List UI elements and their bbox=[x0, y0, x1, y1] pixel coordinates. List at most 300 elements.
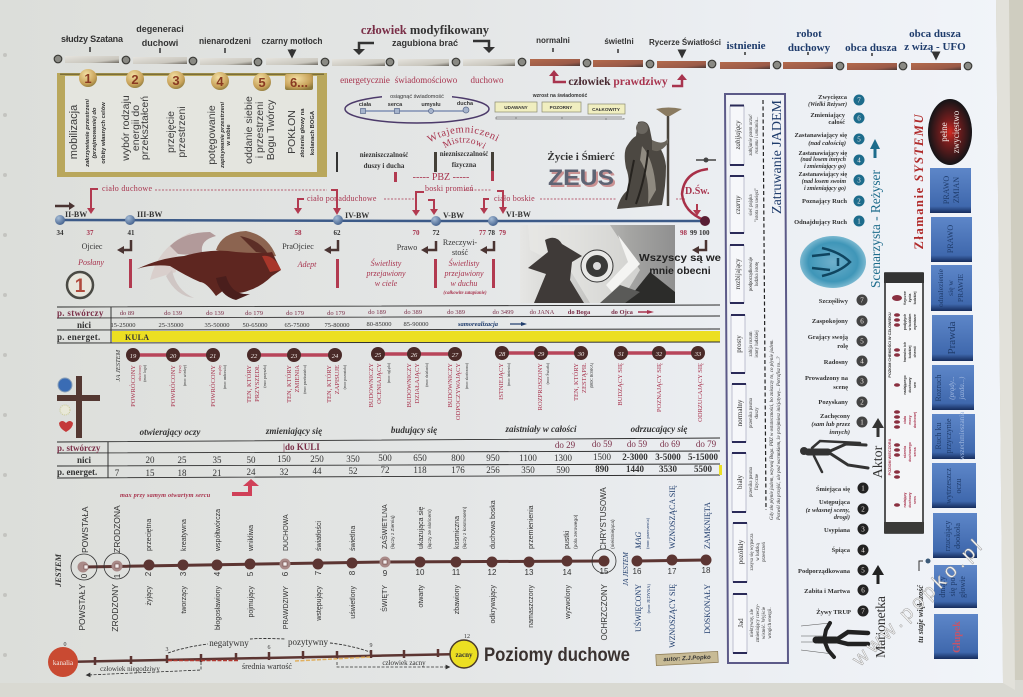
vertical labels below chain: uświetlony bbox=[350, 586, 357, 619]
box: Rozruch: (prądy... bbox=[948, 376, 956, 400]
labels beneath timeline: (całkowite zatapianie) bbox=[443, 291, 487, 296]
table: p. stwórczy, nici, p. energet. (lower): p. stwórczy bbox=[57, 443, 101, 453]
step text bbox=[68, 95, 316, 169]
vertical labels under chain: (moc uzdrawia) bbox=[223, 364, 227, 389]
scale: kanalia to zacny: człowiek niegodziwy bbox=[100, 665, 160, 673]
box: Głupek: Głupek bbox=[952, 621, 963, 653]
top headings: left group: duchowi bbox=[142, 38, 178, 48]
top headings: left group: degeneraci bbox=[136, 24, 184, 34]
section labels: budujący się bbox=[391, 425, 437, 435]
table: p. stwórczy, nici, p. energet. (lower): 7 bbox=[115, 468, 120, 478]
table: p. stwórczy, nici, p. energet. (upper): 35-50000 bbox=[205, 322, 229, 329]
table: p. stwórczy, nici, p. energet. (lower): nici bbox=[77, 455, 91, 465]
vertical labels above chain: CHRYSTUSOWA bbox=[599, 487, 608, 550]
box: normalny: przenika pasma bbox=[749, 397, 754, 428]
step text: Bogu Twórcy bbox=[265, 99, 277, 160]
list: Aktor levels: Radosny bbox=[824, 359, 849, 366]
timeline: blue line with nodes: 78 bbox=[488, 229, 496, 237]
table: p. stwórczy, nici, p. energet. (upper): 75-80000 bbox=[325, 322, 349, 329]
chain: circles 19 to 33: 28 bbox=[499, 351, 506, 358]
box: dmący się po głowie: głowie bbox=[958, 576, 967, 598]
box: rozbijający: podporządkowuje bbox=[749, 257, 754, 291]
table: p. stwórczy, nici, p. energet. (lower): 72 bbox=[380, 465, 390, 475]
timeline: blue line with nodes: 99 bbox=[690, 229, 698, 237]
chain: spiritual levels 0–18: 15 bbox=[600, 567, 609, 576]
badge: pełne zwycięstwo: zwycięstwo bbox=[951, 110, 961, 153]
niezniszczalność blocks and PBZ: niezniszczalność bbox=[440, 150, 488, 158]
vertical labels below chain: WZNOSZĄCY SIĘ bbox=[668, 584, 677, 648]
vertical labels below chain bbox=[77, 551, 712, 648]
vertical labels under chain: ODRZUCAJĄCY SIĘ bbox=[697, 363, 704, 422]
table: p. stwórczy, nici, p. energet. (upper): do 389 bbox=[447, 309, 465, 316]
box: Rozruch: Rozruch bbox=[934, 374, 943, 402]
vertical labels under chain: (MOC BOSKA) bbox=[590, 362, 594, 388]
chain: spiritual levels 0–18: 16 bbox=[633, 567, 642, 576]
scale: kanalia to zacny: 0 bbox=[64, 642, 66, 648]
text: Wszyscy są we mnie obecni: mnie obecni bbox=[649, 265, 711, 277]
table: p. stwórczy, nici, p. energet. (lower): 500 bbox=[378, 453, 392, 463]
table: p. stwórczy, nici, p. energet. (lower): 250 bbox=[310, 454, 324, 464]
timeline: blue line with nodes: V-BW bbox=[443, 211, 464, 220]
vertical labels under chain: TEN, KTÓRY bbox=[245, 365, 253, 403]
box: zabijający bbox=[730, 106, 760, 165]
vertical labels above chain: wnikliwa bbox=[248, 525, 255, 552]
chain: spiritual levels 0–18: 3 bbox=[179, 571, 188, 576]
list: Scenarzysta levels: i zmieniający go) bbox=[804, 163, 846, 170]
list: Scenarzysta levels bbox=[794, 94, 883, 288]
box: odnalezienie się w PRAWIE: PRAWIE bbox=[956, 274, 965, 302]
timeline: blue line with nodes: 72 bbox=[432, 229, 440, 237]
vertical labels above chain: przeciętna bbox=[146, 519, 153, 551]
table: p. stwórczy, nici, p. energet. (upper): KULA bbox=[125, 333, 149, 342]
list: Aktor levels: scenę bbox=[833, 384, 848, 391]
step text: i przestrzeni bbox=[254, 102, 266, 158]
timeline: blue line with nodes: 77 bbox=[479, 229, 486, 237]
vertical labels under chain: ZAPISUJE bbox=[334, 365, 341, 394]
chain: circles 19 to 33: 24 bbox=[332, 353, 339, 360]
panel: levels of heat (black frame): życia bbox=[908, 294, 912, 302]
box: Jad: Jad bbox=[737, 618, 745, 628]
step numbers: 6... bbox=[290, 75, 308, 90]
panel: levels of heat (black frame): duchowy bbox=[908, 492, 912, 508]
vertical labels above chain: JESTEM bbox=[53, 553, 63, 588]
heading group: ciało duchowe, ponadduchowe, boski promień, boskie bbox=[87, 184, 701, 216]
ZEUS title: ZEUS bbox=[550, 167, 616, 192]
table: p. stwórczy, nici, p. energet. (upper): p. energet. bbox=[57, 332, 101, 342]
list: Aktor levels: Grający swoją bbox=[808, 334, 849, 341]
box: Jad: zmieniający rzeczy- bbox=[756, 603, 761, 642]
vertical labels below chain: otwarty bbox=[418, 585, 425, 608]
boxes: UDAWANY, POZORNY, CAŁKOWITY: POZORNY bbox=[550, 105, 572, 110]
table: p. stwórczy, nici, p. energet. (upper): 50-65000 bbox=[243, 322, 267, 329]
box: normalny: duszy bbox=[755, 407, 760, 419]
scale: kanalia to zacny: człowiek zacny bbox=[382, 659, 426, 667]
image: warrior photo with mandala bbox=[520, 225, 675, 303]
panel: levels of heat (black frame): chemii bbox=[913, 346, 917, 358]
box: czarny: czarny bbox=[734, 195, 742, 214]
niezniszczalność blocks and PBZ: ----- PBZ ----- bbox=[413, 172, 469, 183]
box: prosty: zabija rozum bbox=[749, 331, 754, 356]
labels beneath timeline: Świetlisty bbox=[449, 259, 480, 268]
chain: spiritual levels 0–18: 5 bbox=[246, 571, 255, 576]
box: wytrzeszcz oczu bbox=[932, 463, 976, 508]
box: czarny: sieć pająka bbox=[749, 194, 754, 216]
chain: circles 19 to 33: 33 bbox=[694, 351, 702, 358]
box: rzucający dookoła: rzucający bbox=[943, 521, 952, 551]
step numbers: 5 bbox=[258, 75, 266, 90]
list: Marionetka levels: 6 bbox=[861, 586, 865, 594]
list: Aktor levels: rolę bbox=[837, 343, 848, 350]
table: p. stwórczy, nici, p. energet. (lower): 950 bbox=[486, 453, 500, 463]
box: Jad: niektywny, ale bbox=[750, 609, 755, 637]
vertical labels under chain: TEN, KTÓRY bbox=[285, 365, 293, 403]
badge: pełne zwycięstwo: pełne bbox=[939, 122, 949, 142]
list: Aktor levels: (sam lub przez bbox=[811, 421, 850, 428]
ellipse: osiągnąć świadomość: ducha bbox=[457, 101, 474, 107]
timeline: blue line with nodes: 41 bbox=[128, 229, 135, 237]
ZEUS title bbox=[547, 151, 616, 192]
list: Aktor levels: Pozyskany bbox=[818, 399, 849, 406]
vertical labels under chain: ROZPROSZONY bbox=[537, 363, 544, 410]
list: Marionetka levels: 7 bbox=[861, 608, 865, 616]
title: Poziomy duchowe: Poziomy duchowe bbox=[484, 645, 630, 666]
table: p. stwórczy, nici, p. energet. (lower): 350 bbox=[521, 465, 535, 475]
table: p. stwórczy, nici, p. energet. (lower): 50 bbox=[246, 455, 256, 465]
panel: levels of heat (black frame): duchowej bbox=[913, 412, 917, 428]
chain: spiritual levels 0–18: 18 bbox=[702, 566, 711, 575]
vertical labels under chain: BUDOWNICZY bbox=[447, 363, 454, 407]
table: p. stwórczy, nici, p. energet. (lower): 32 bbox=[280, 467, 288, 477]
heading: człowiek modyfikowany: duchowo bbox=[470, 75, 504, 85]
vertical labels below chain: zbawiony bbox=[454, 585, 461, 614]
panel: levels of heat (black frame): duchowy bbox=[908, 377, 912, 393]
timeline: blue line with nodes: II-BW bbox=[65, 210, 87, 219]
box: prosty: istoty ludzkiej bbox=[755, 330, 760, 358]
chain: circles 19 to 33: 26 bbox=[411, 352, 418, 359]
D.Św. arc: D.Św. bbox=[685, 185, 710, 197]
box: normalny bbox=[732, 384, 760, 442]
boxes: UDAWANY, POZORNY, CAŁKOWITY bbox=[495, 93, 625, 120]
timeline: blue line with nodes: 100 bbox=[699, 229, 710, 237]
list: Marionetka levels: Podporządkowana bbox=[798, 568, 851, 575]
box: Rozruch bbox=[932, 365, 974, 410]
step text: zakrzywianie przestrzeni bbox=[85, 99, 91, 168]
heading: człowiek modyfikowany: człowiek modyfikowany bbox=[361, 23, 490, 37]
panel: levels of heat (black frame): serca bbox=[913, 447, 917, 457]
vertical labels under chain: PRZYSZEDŁ bbox=[254, 365, 261, 402]
step text: złożenie głowy na bbox=[300, 108, 306, 157]
chain: spiritual levels 0–18: 1 bbox=[113, 573, 122, 578]
vertical labels above chain: duchowa boska bbox=[490, 500, 497, 549]
table: p. stwórczy, nici, p. energet. (upper): do 389 bbox=[404, 309, 422, 316]
vertical labels below chain: POWSTAŁY bbox=[77, 584, 87, 631]
table: p. stwórczy, nici, p. energet. (lower): 24 bbox=[246, 467, 256, 477]
callout: tu staje większość bbox=[916, 558, 930, 643]
box: PRAWO bbox=[931, 217, 972, 262]
box: czarny bbox=[730, 176, 760, 233]
section labels: zmieniający się bbox=[265, 426, 322, 436]
vertical labels under chain: POWRÓCONY bbox=[169, 365, 177, 407]
panel: levels of heat (black frame): POZIOM WIECZORA bbox=[888, 438, 892, 475]
step numbers: 1 bbox=[84, 71, 92, 86]
text: advice about poison: Pozwól złu przejść, ale pod warunkiem, że przejmiesz inicjatywę... Potrafisz to...? bbox=[777, 356, 782, 521]
candle flames bbox=[892, 295, 902, 507]
chain: spiritual levels 0–18: 14 bbox=[563, 568, 572, 577]
box: Głupek bbox=[934, 614, 978, 659]
panel: levels of heat (black frame): nadający bbox=[903, 492, 907, 507]
table: p. stwórczy, nici, p. energet. (lower): do 79 bbox=[696, 439, 717, 449]
vertical labels under chain: (moc przyszła) bbox=[263, 364, 267, 388]
list: Scenarzysta levels: 4 bbox=[857, 156, 861, 164]
chain: circles 19 to 33: 30 bbox=[577, 351, 585, 358]
timeline: blue line with nodes: 62 bbox=[334, 229, 341, 237]
panel: levels of heat (black frame): sens bbox=[913, 496, 917, 504]
step numbers: 3 bbox=[172, 73, 180, 88]
box: Rozruch: jazda...) bbox=[958, 376, 966, 400]
vertical labels below chain: odkrywający bbox=[490, 585, 497, 624]
vertical labels under chain: (moc pozostała) bbox=[343, 364, 347, 389]
callout: max przy samym otwartym sercu bbox=[120, 479, 259, 499]
list: Marionetka levels: Śpiąca bbox=[832, 546, 851, 554]
icon: blue face bbox=[800, 236, 866, 288]
timeline: blue line with nodes: 70 bbox=[412, 229, 420, 237]
panel: levels of heat (black frame): ludzkiej bbox=[908, 346, 912, 358]
vertical labels below chain: UŚWIĘCONY bbox=[633, 584, 643, 632]
box: pozółkły bbox=[733, 523, 767, 582]
table: p. stwórczy, nici, p. energet. (lower): 52 bbox=[348, 466, 358, 476]
vertical labels under chain: ISTNIEJĄCY bbox=[498, 363, 505, 400]
list: Aktor levels: 2 bbox=[860, 398, 864, 406]
panel: levels of heat (black frame): sen bbox=[913, 382, 917, 388]
step text: przejęcie bbox=[165, 111, 177, 153]
chain: circles 19 to 33: 27 bbox=[452, 352, 459, 359]
list: Scenarzysta levels: Zwycięzca bbox=[818, 94, 848, 101]
box: zabijający: zabijanie pasm uczuć bbox=[749, 114, 754, 157]
chain: spiritual levels 0–18: 7 bbox=[314, 570, 323, 575]
vertical labels below chain: ZRODZONY bbox=[110, 584, 120, 632]
box: rozbijający: rozbijający bbox=[734, 258, 742, 290]
stacked blue boxes bbox=[930, 168, 978, 659]
box: PRAWO ZMIAN: ZMIAN bbox=[952, 177, 961, 203]
table: p. stwórczy, nici, p. energet. (lower): 890 bbox=[595, 464, 609, 474]
heading: człowiek modyfikowany: zagubiona brać bbox=[392, 38, 458, 48]
list: Scenarzysta levels: 6 bbox=[857, 114, 861, 122]
scale: kanalia to zacny: zacny bbox=[455, 651, 473, 659]
list: Marionetka levels: Usypiana bbox=[824, 527, 851, 534]
box: PRAWO ZMIAN: PRAWO bbox=[942, 176, 951, 204]
table: p. stwórczy, nici, p. energet. (lower): 800 bbox=[451, 453, 465, 463]
labels beneath timeline bbox=[77, 238, 706, 296]
table: p. stwórczy, nici, p. energet. (lower): 1500 bbox=[593, 452, 612, 462]
panel: levels of heat (black frame): w ludzkim bbox=[908, 314, 912, 331]
ellipse: osiągnąć świadomość: serca bbox=[388, 102, 403, 108]
box: wytrzeszcz oczu: oczu bbox=[954, 478, 963, 494]
chain: spiritual levels 0–18: 9 bbox=[383, 569, 388, 578]
table: p. stwórczy, nici, p. energet. (lower): 590 bbox=[556, 465, 570, 475]
boxes: UDAWANY, POZORNY, CAŁKOWITY: wzrost na świadomość bbox=[532, 93, 587, 99]
box: dmący się po głowie: dmący bbox=[938, 576, 947, 598]
list: Scenarzysta levels: (nad całością) bbox=[808, 140, 846, 147]
list: Aktor levels: Szczęśliwy bbox=[819, 298, 849, 305]
list: Marionetka levels: 1 bbox=[861, 484, 865, 492]
heading group: ciało duchowe, ponadduchowe, boski promień, boskie: boski promień bbox=[425, 184, 474, 193]
vertical labels above chain: (pola zerowego) bbox=[573, 514, 579, 549]
step text: orbity własnych celów bbox=[101, 102, 107, 164]
vertical labels under chain: ZMIENIA bbox=[294, 365, 301, 392]
vertical labels above chain: przemienienia bbox=[528, 505, 535, 549]
chain: spiritual levels 0–18: 11 bbox=[452, 568, 461, 577]
table: p. stwórczy, nici, p. energet. (upper): 65-75000 bbox=[285, 322, 309, 329]
top headings: right group bbox=[726, 28, 966, 56]
step text: przestrzeni bbox=[176, 106, 188, 158]
badge: pełne zwycięstwo bbox=[928, 99, 972, 165]
D.Św. arc bbox=[682, 158, 716, 220]
list: Marionetka levels: 4 bbox=[861, 546, 865, 554]
list: Scenarzysta levels: Scenarzysta - Reżyser bbox=[868, 170, 883, 288]
table: p. stwórczy, nici, p. energet. (lower): do 69 bbox=[660, 439, 681, 449]
list: Aktor levels: Zachęcony bbox=[820, 413, 851, 420]
box: rzucający dookoła bbox=[933, 513, 977, 558]
table: p. stwórczy, nici, p. energet. (lower): 5500 bbox=[694, 464, 712, 474]
box: biały: fizyczne bbox=[755, 474, 760, 490]
chain: spiritual levels 0–18: 13 bbox=[525, 568, 534, 577]
box: pozółkły: pozółkły bbox=[737, 539, 745, 564]
box: pozółkły: w ludzką bbox=[756, 542, 761, 561]
box: biały: biały bbox=[736, 475, 744, 489]
list: Scenarzysta levels: Zastanawiający się bbox=[794, 132, 847, 139]
vertical labels under chain: (moc Światła) bbox=[545, 362, 550, 384]
table: p. stwórczy, nici, p. energet. (lower): 44 bbox=[312, 466, 322, 476]
table: p. stwórczy, nici, p. energet. (lower): 3-5000 bbox=[655, 452, 681, 462]
step text: kolanach BOGA bbox=[310, 110, 316, 155]
top headings: left group bbox=[61, 24, 322, 54]
vertical labels above chain: WZNOSZĄCA SIĘ bbox=[668, 485, 677, 549]
top headings: left group: słudzy Szatana bbox=[61, 34, 124, 44]
niezniszczalność blocks and PBZ: fizyczna bbox=[452, 161, 477, 169]
list: Marionetka levels: drogi) bbox=[834, 514, 850, 521]
chain: spiritual levels 0–18: 6 bbox=[281, 571, 290, 576]
box: zabijający: zabijający bbox=[734, 120, 742, 150]
vertical labels below chain: PRAWDZIWY bbox=[283, 586, 290, 629]
table: p. stwórczy, nici, p. energet. (lower): do 59 bbox=[627, 439, 648, 449]
vertical labels under chain: DZIAŁAJĄCY bbox=[414, 363, 421, 403]
chain: circles 19 to 33: 22 bbox=[251, 353, 258, 360]
step text: (przejmowanie) do bbox=[92, 107, 98, 158]
table: p. stwórczy, nici, p. energet. (upper): do 139 bbox=[206, 310, 224, 317]
panel: Zatruwanie JADEM bbox=[725, 94, 788, 663]
table: p. stwórczy, nici, p. energet. (upper): do Ojca bbox=[611, 309, 634, 316]
niezniszczalność blocks and PBZ: niezniszczalność bbox=[360, 151, 408, 159]
table: p. stwórczy, nici, p. energet. (lower): 176 bbox=[451, 465, 465, 475]
top headings: right group: obca dusza bbox=[909, 28, 961, 40]
table: p. stwórczy, nici, p. energet. (upper) bbox=[57, 305, 720, 343]
labels beneath timeline: Posłany bbox=[77, 258, 104, 267]
step text: energii do bbox=[130, 105, 142, 151]
table: p. stwórczy, nici, p. energet. (lower): 5-15000 bbox=[688, 452, 718, 462]
scale: kanalia to zacny: 9 bbox=[370, 643, 372, 649]
vertical labels under chain: POWRÓCONY bbox=[209, 365, 217, 407]
list: Aktor levels: Aktor bbox=[871, 445, 886, 478]
box: Ruch ku przyczynie: przyczynie bbox=[944, 418, 953, 454]
vertical labels above chain: (łączy z Ziemią) bbox=[390, 515, 396, 549]
scale: kanalia to zacny: pozytywny bbox=[288, 637, 328, 647]
panel: levels of heat (black frame): ludzkiej bbox=[913, 292, 917, 304]
vertical labels under chain: ODPOCZYWAJĄCY bbox=[455, 363, 462, 420]
timeline: blue line with nodes: VI-BW bbox=[506, 210, 531, 219]
icon: numbered circle 1: 1 bbox=[75, 276, 86, 297]
vertical labels above chain bbox=[53, 485, 712, 588]
table: p. stwórczy, nici, p. energet. (lower): 118 bbox=[413, 465, 427, 475]
vertical labels above chain: (łączy ze słońcem) bbox=[427, 509, 433, 549]
table: p. stwórczy, nici, p. energet. (upper): p. stwórczy bbox=[57, 308, 104, 318]
table: p. stwórczy, nici, p. energet. (lower): p. energet. bbox=[57, 467, 97, 477]
box: pozółkły: przestrzeń bbox=[762, 542, 767, 562]
heading: człowiek modyfikowany bbox=[340, 23, 504, 85]
vertical labels under chain: TEN, KTÓRY bbox=[572, 363, 580, 401]
scale: kanalia to zacny: negatywny bbox=[209, 638, 249, 648]
author plate: autor: Z.J.Popko bbox=[663, 655, 711, 663]
box: rozbijający: ludzka istotę bbox=[755, 262, 760, 286]
labels beneath timeline: w ciele bbox=[375, 279, 398, 288]
table: p. stwórczy, nici, p. energet. (lower): 350 bbox=[346, 454, 360, 464]
box: Prawda bbox=[932, 315, 973, 361]
vertical labels under chain: TEN, KTÓRY bbox=[325, 365, 333, 403]
vertical labels below chain: błogosławiony bbox=[215, 586, 222, 630]
list: Aktor levels: 4 bbox=[860, 358, 864, 366]
table: p. stwórczy, nici, p. energet. (upper): do Boga bbox=[568, 309, 591, 316]
table: p. stwórczy, nici, p. energet. (lower): 150 bbox=[277, 454, 291, 464]
ellipse: osiągnąć świadomość: osiągnąć świadomość bbox=[390, 94, 444, 100]
chain: spiritual levels 0–18: 17 bbox=[668, 567, 677, 576]
scale: kanalia to zacny: 3 bbox=[166, 647, 168, 653]
panel: levels of heat (black frame): ciała bbox=[903, 416, 907, 424]
ZEUS title: Życie i Śmierć bbox=[547, 151, 615, 163]
box: czarny: "istota na uwięzi" bbox=[755, 188, 760, 222]
step numbers: 2 bbox=[131, 72, 139, 87]
list: Scenarzysta levels: 1 bbox=[857, 218, 861, 226]
list: Scenarzysta levels: (Wielki Reżyser) bbox=[808, 101, 847, 108]
table: p. stwórczy, nici, p. energet. (lower): 1100 bbox=[519, 453, 537, 463]
table: p. stwórczy, nici, p. energet. (lower) bbox=[57, 438, 722, 478]
box: dmący się po głowie bbox=[934, 565, 977, 608]
vertical labels above chain: pustki bbox=[564, 530, 571, 549]
chain: circles 19 to 33: 23 bbox=[291, 353, 298, 360]
chain: spiritual levels 0–18: 0 bbox=[80, 573, 89, 578]
section labels: otwierający oczy bbox=[140, 427, 201, 437]
box: Ruch ku przyczynie bbox=[932, 411, 975, 460]
labels beneath timeline: stość bbox=[452, 248, 468, 257]
vertical labels under chain: OCENIAJĄCY bbox=[376, 363, 383, 404]
ZEUS title: ZEUS bbox=[548, 165, 614, 190]
list: Aktor levels bbox=[805, 294, 886, 478]
watermark: www.popko.pl: www.popko.pl bbox=[847, 536, 986, 671]
text: Wszyscy są we mnie obecni bbox=[639, 252, 721, 277]
top headings: left group: czarny motłoch bbox=[262, 36, 322, 46]
chain: circles 19 to 33: 21 bbox=[210, 353, 216, 360]
vertical labels under chain: (moc istnienia) bbox=[507, 362, 511, 386]
timeline: blue line with nodes: IV-BW bbox=[345, 211, 369, 220]
vertical labels above chain: ukazująca się bbox=[418, 506, 425, 549]
list: Scenarzysta levels: Zmieniający bbox=[810, 112, 846, 119]
labels beneath timeline: Ojciec bbox=[82, 242, 103, 251]
chain: circles 19 to 33: 31 bbox=[617, 351, 624, 358]
vertical labels under chain: POWRÓCONY bbox=[129, 365, 137, 407]
list: Scenarzysta levels: 5 bbox=[857, 136, 861, 144]
timeline: blue line with nodes: 98 bbox=[680, 229, 688, 237]
vertical labels above chain: (nieistniejąca) bbox=[610, 519, 616, 549]
chain: circles 19 to 33: 19 bbox=[130, 353, 137, 360]
list: Scenarzysta levels: 7 bbox=[857, 96, 861, 104]
